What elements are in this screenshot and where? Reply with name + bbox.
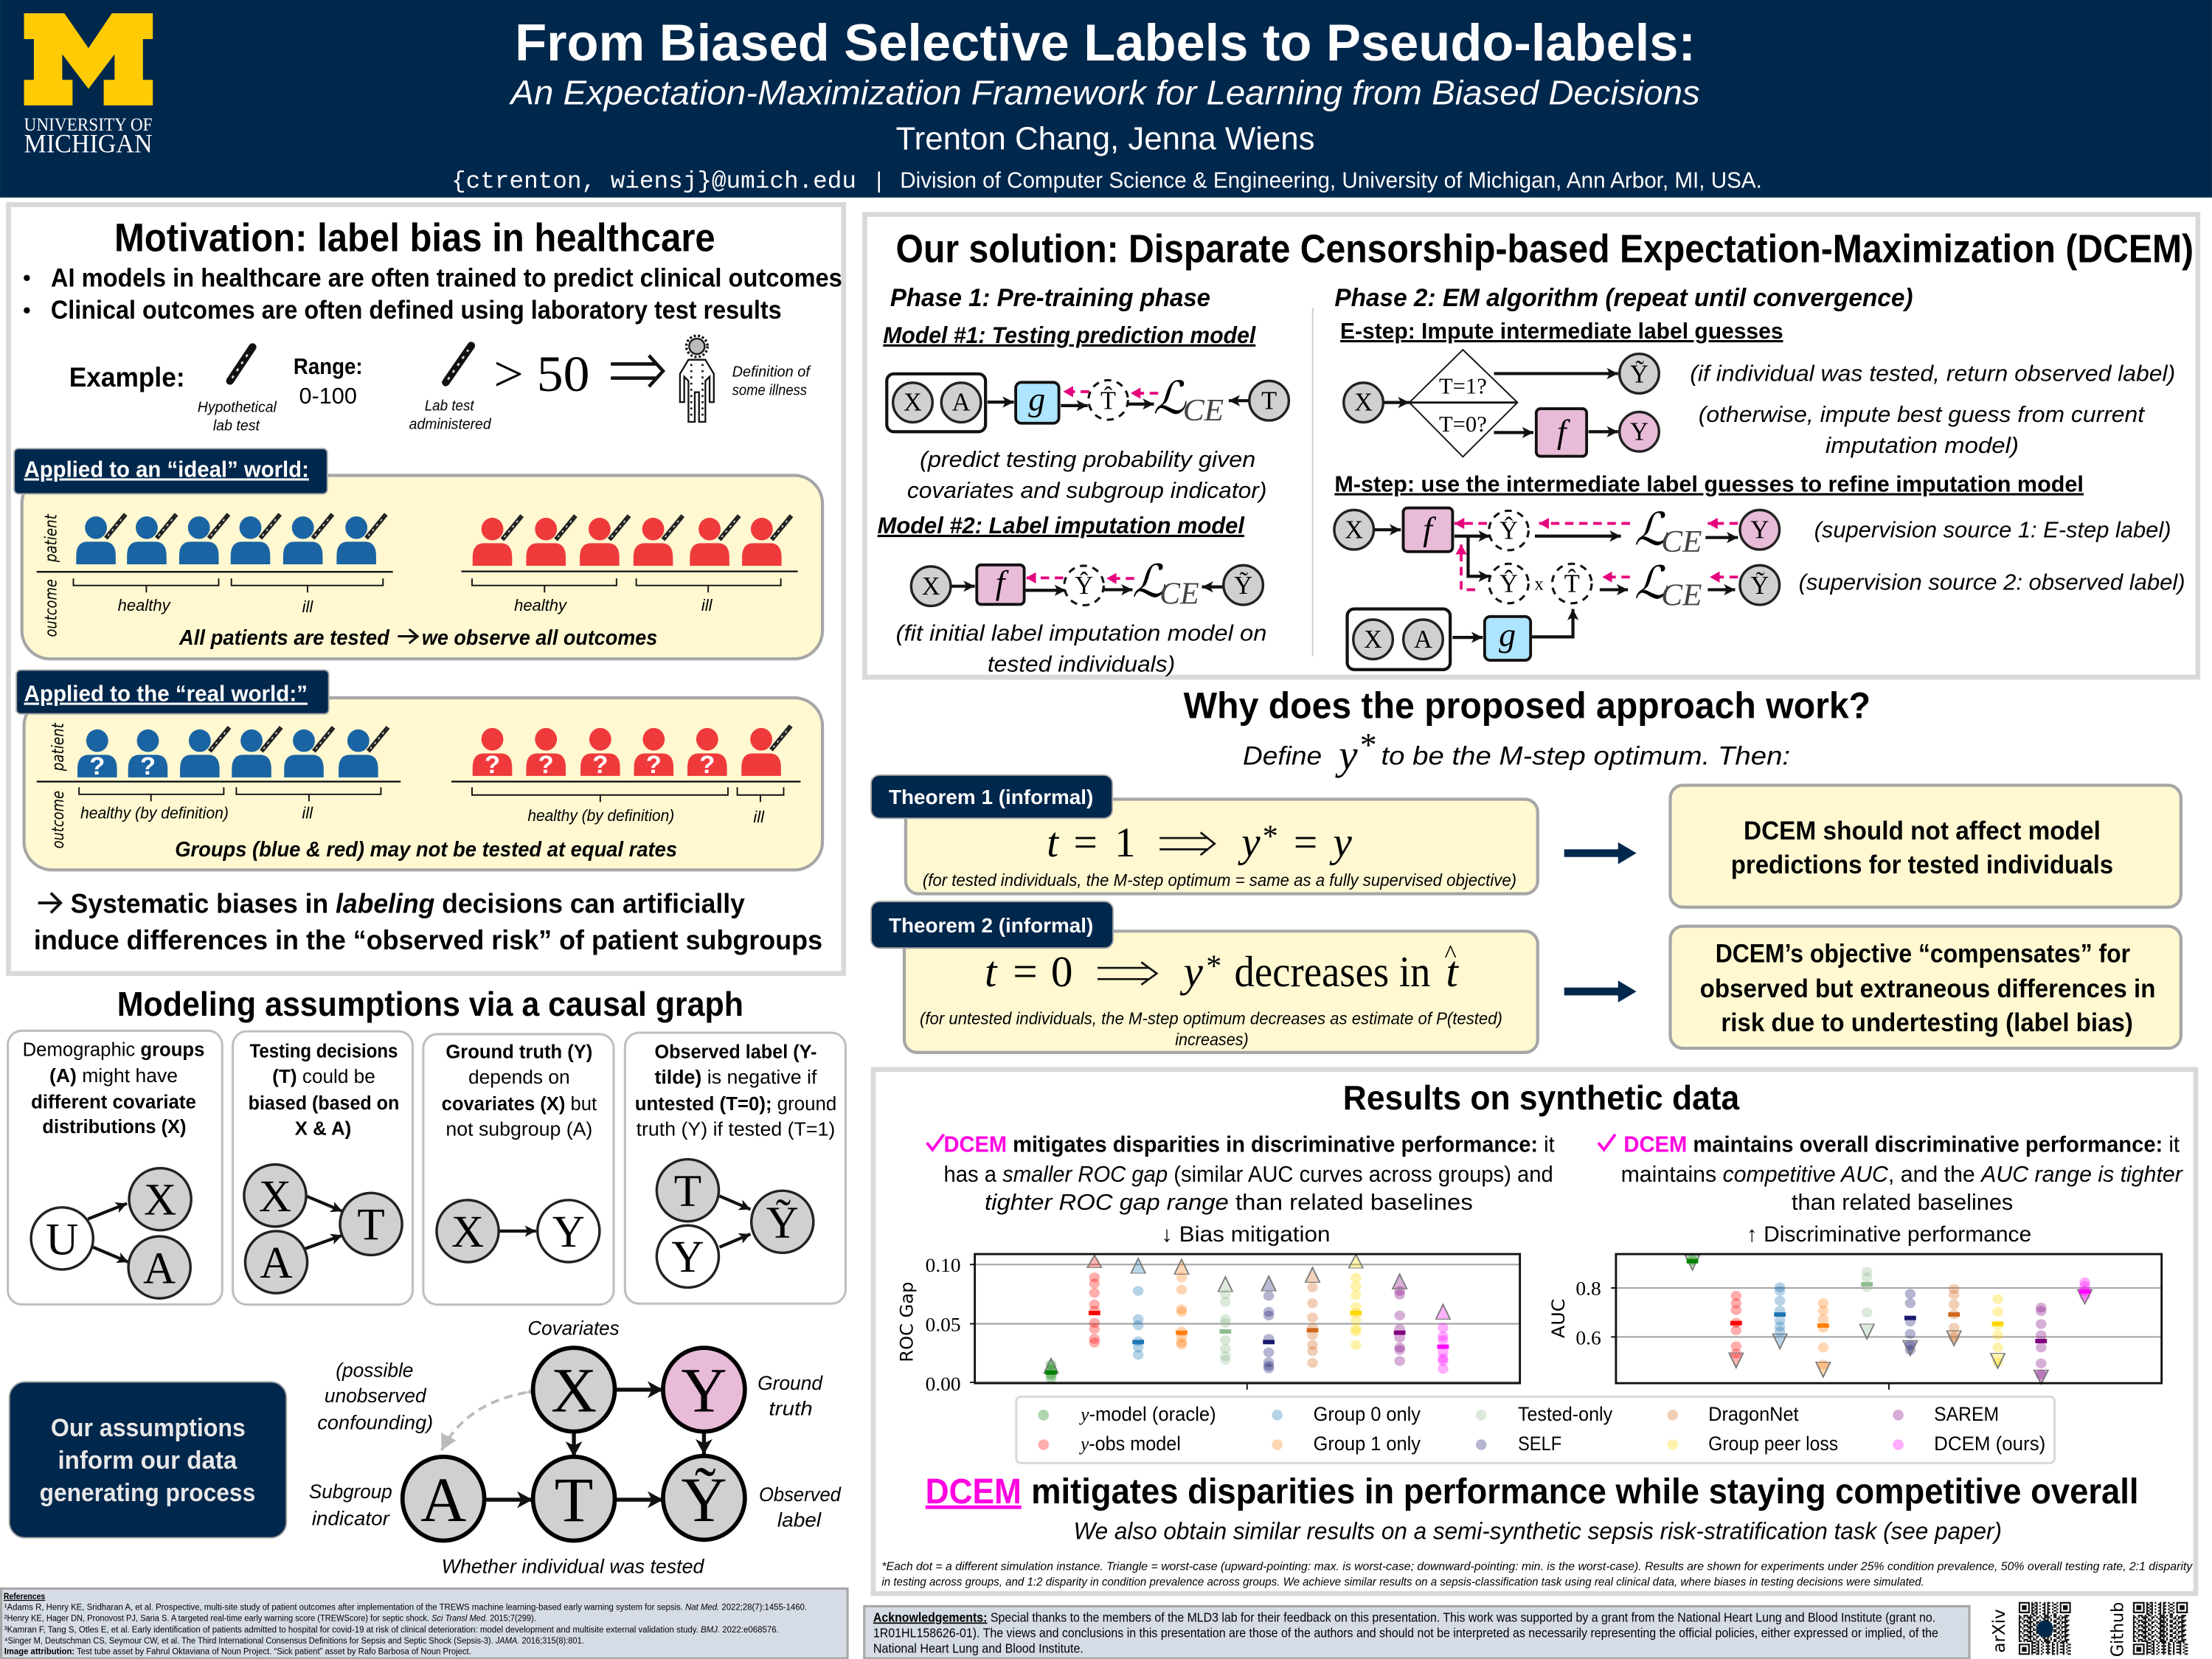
heading: why: Why does the proposed approach work?	[1184, 685, 1871, 727]
callout: assumptions inform data generating process: Our assumptions	[51, 1414, 246, 1442]
key takeaway: mitigates disparities in performance while staying competitive overall	[1031, 1472, 2139, 1511]
red patients, rarely tested: ?	[699, 751, 715, 779]
card: observed label	[625, 1033, 845, 1303]
key takeaway: DCEM	[926, 1472, 1022, 1511]
example definition row: Hypothetical	[198, 399, 277, 415]
formula: theorem 2: y	[1180, 947, 1204, 996]
chart legend: SAREM	[1934, 1403, 1999, 1425]
callout: assumptions inform data generating process: inform our data	[58, 1447, 238, 1475]
formula: theorem 1: =	[1294, 820, 1317, 866]
chart: ROC gap: 0.10	[926, 1254, 961, 1276]
implication box 2: observed but extraneous differences in	[1700, 974, 2155, 1003]
caption: unequal rates: Groups (blue & red) may not be tested at equal rates	[175, 838, 677, 862]
diagram: E-step: f	[1557, 413, 1571, 451]
diagram: label imputation model: Ỹ	[1234, 572, 1252, 600]
panel: ideal world	[14, 448, 822, 659]
QR code: arXiv	[1990, 1602, 2071, 1655]
formula: theorem 1	[1047, 820, 1352, 866]
results text: bias mitigation	[927, 1132, 1555, 1215]
heading: causal graph: Modeling assumptions via a causal graph	[117, 985, 743, 1023]
chart: AUC: AUC	[1548, 1299, 1569, 1338]
diagram: data generating process graph: Ỹ	[681, 1464, 727, 1535]
card: ground truth: depends on	[468, 1067, 570, 1088]
authors: Trenton Chang, Jenna Wiens	[896, 121, 1315, 157]
outcome labels: ill	[302, 803, 313, 822]
node labels: Ground	[757, 1372, 823, 1394]
outcome labels: healthy (by definition)	[527, 806, 674, 825]
diagram: testing prediction model: X	[904, 389, 922, 417]
outcome labels	[80, 803, 765, 826]
results text: bias mitigation: DCEM mitigates disparities in discriminative performance: it	[944, 1132, 1555, 1157]
example definition row: some illness	[732, 383, 807, 399]
diagram: M-step: Ỹ	[1750, 572, 1769, 600]
formula: theorem 2: ^	[1445, 940, 1457, 968]
heading: results: Results on synthetic data	[1343, 1078, 1740, 1117]
callout: assumptions inform data generating process: generating process	[40, 1479, 255, 1507]
caption: all tested	[178, 626, 657, 650]
card: ground truth: not subgroup (A)	[445, 1120, 592, 1140]
card: testing decisions: X & A)	[295, 1119, 351, 1140]
diagram: E-step: Y	[1630, 418, 1648, 446]
diagram: M-step: X	[1364, 626, 1382, 654]
diagram: label imputation model: Ŷ	[1075, 572, 1093, 600]
chart legend: y-model (oracle)	[1078, 1403, 1216, 1425]
QR code: arXiv: arXiv	[1990, 1609, 2009, 1653]
references box: ²Henry KE, Hager DN, Pronovost PJ, Saria S. A targeted real-time early warning score (TREWScore) for septic shock. Sci Transl Med. 2015;7(299).	[4, 1613, 536, 1624]
chart: AUC	[1548, 1222, 2162, 1390]
icon: sick patient	[680, 336, 714, 422]
formula: theorem 2: 0	[1051, 947, 1073, 996]
diagram: label imputation model: CE	[1159, 578, 1199, 612]
bullet list	[24, 263, 842, 325]
panel: motivation	[9, 204, 844, 974]
card: demographic groups: Demographic groups	[23, 1040, 204, 1061]
implication box 1: predictions for tested individuals	[1731, 851, 2113, 879]
footnote: in testing across groups, and 1:2 disparity in condition prevalence across groups. We achieve similar results on a sepsis-classification task using real clinical data, where biases in testing decisions were simulated.	[881, 1576, 1924, 1589]
outcome labels: ill	[701, 596, 713, 614]
implication box 2	[1671, 927, 2181, 1048]
references box	[1, 1589, 847, 1658]
formula: theorem 2: *	[1206, 950, 1221, 984]
graph: T and Y to Y-tilde: T	[674, 1166, 701, 1216]
diagram: testing prediction model: A	[952, 389, 971, 417]
node labels: Whether individual was tested	[442, 1556, 705, 1578]
definition line: to be the M-step optimum. Then:	[1381, 742, 1790, 771]
chart legend: DragonNet	[1708, 1403, 1799, 1425]
diagram: testing prediction model: T̂	[1100, 387, 1116, 415]
formula: theorem 1: t	[1047, 820, 1060, 866]
email and affiliation: |	[876, 167, 882, 193]
red patients, rarely tested	[473, 726, 791, 779]
node labels: label	[777, 1509, 822, 1531]
card: observed label: Observed label (Y-	[654, 1042, 817, 1062]
title: From Biased Selective Labels to Pseudo-labels:	[515, 13, 1696, 72]
formula: theorem 1: y	[1238, 820, 1261, 866]
panel: real world: outcome	[49, 791, 68, 848]
subtitle: An Expectation-Maximization Framework for Learning from Biased Decisions	[508, 74, 1700, 112]
diagram: E-step: T=1?	[1439, 374, 1487, 399]
theorem 2: Theorem 2 (informal)	[889, 914, 1093, 937]
results text: bias mitigation: has a smaller ROC gap (similar AUC curves across groups) and	[944, 1162, 1553, 1187]
results text: discriminative performance: maintains competitive AUC, and the AUC range is tighter	[1621, 1162, 2184, 1187]
node labels: Observed	[759, 1483, 842, 1506]
node labels: confounding)	[317, 1411, 433, 1433]
chart: AUC: ↑ Discriminative performance	[1747, 1222, 2031, 1247]
definition line: *	[1360, 726, 1377, 763]
chart legend: Tested-only	[1518, 1403, 1613, 1425]
node labels: (possible	[336, 1360, 413, 1382]
phase 1 column: Model #2: Label imputation model	[878, 512, 1245, 538]
logo: University of Michigan: UNIVERSITY OF	[24, 114, 153, 135]
diagram: testing prediction model: T	[1261, 387, 1277, 415]
email and affiliation: {ctrenton, wiensj}@umich.edu	[451, 167, 856, 195]
results text: discriminative performance: DCEM maintains overall discriminative performance: it	[1623, 1132, 2180, 1157]
chart: ROC gap: ROC Gap	[896, 1282, 917, 1362]
panel: our solution	[864, 215, 2198, 677]
graph: U to X and A: A	[143, 1243, 176, 1293]
diagram: E-step: Ỹ	[1630, 360, 1648, 388]
chart legend: y-obs model	[1078, 1433, 1181, 1455]
diagram: M-step: Ŷ	[1499, 517, 1518, 545]
diagram: E-step	[1344, 350, 1659, 457]
panel: ideal world: patient	[43, 513, 61, 563]
results text: discriminative performance	[1598, 1132, 2184, 1215]
outcome labels: ill	[753, 808, 765, 826]
diagram: testing prediction model	[887, 373, 1289, 432]
footnote: *Each dot = a different simulation instance. Triangle = worst-case (upward-pointing: max. is worst-case; downward-pointing: min. is the worst-case). Results are shown for experiments under 25% condition prevalence, 50% overall testing rate, 2:1 disparity	[881, 1560, 2193, 1573]
diagram: M-step: CE	[1661, 525, 1702, 559]
definition line	[1243, 726, 1790, 778]
graph: U to X and A	[31, 1168, 191, 1298]
phase 1 column: Model #1: Testing prediction model	[883, 322, 1256, 348]
chart legend: SELF	[1518, 1433, 1561, 1455]
card: observed label: tilde) is negative if	[654, 1067, 817, 1088]
arrow: theorem 2 to implication	[1564, 980, 1637, 1002]
section: why does it work	[871, 685, 2181, 1053]
card: testing decisions: (T) could be	[272, 1067, 375, 1087]
diagram: data generating process graph: Y	[681, 1355, 727, 1426]
red patients, rarely tested: ?	[538, 751, 554, 779]
outcome labels: healthy (by definition)	[80, 803, 229, 822]
references box: ⁴Singer M, Deutschman CS, Seymour CW, et al. The Third International Consensus Definitions for Sepsis and Septic Shock (Sepsis-3). JAMA. 2016;315(8):801.	[4, 1635, 584, 1646]
chart legend: Group 1 only	[1314, 1433, 1421, 1455]
chart: AUC: 0.6	[1575, 1327, 1601, 1349]
caption: all tested: we observe all outcomes	[422, 626, 657, 650]
email and affiliation: Division of Computer Science & Engineering, University of Michigan, Ann Arbor, MI, USA.	[900, 167, 1762, 193]
diagram: label imputation model: f	[996, 564, 1010, 601]
example definition row	[69, 336, 811, 434]
example definition row: 0-100	[299, 384, 357, 409]
theorem 1	[871, 775, 1538, 894]
references box: Image attribution: Test tube asset by Fahrul Oktaviana of Noun Project. “Sick patient” asset by Rafo Barbosa of Noun Project.	[4, 1646, 471, 1656]
results text: bias mitigation: tighter ROC gap range than related baselines	[985, 1190, 1473, 1215]
diagram: M-step: A	[1414, 626, 1432, 654]
phase 2 column: imputation model)	[1826, 433, 2019, 458]
acknowledgements box: 1R01HL158626-01). The views and conclusions in this presentation are those of the authors and should not be interpreted as necessarily representing the official policies, either expressed or implied, of the	[873, 1626, 1938, 1641]
blue patients, all tested	[76, 514, 386, 564]
card: testing decisions: biased (based on	[249, 1093, 399, 1114]
implication box 1	[1671, 786, 2181, 907]
tab: real world	[16, 670, 329, 714]
formula: theorem 1: 1	[1114, 820, 1136, 866]
card: ground truth	[423, 1034, 614, 1305]
conclusion statement: Systematic biases in labeling decisions can artificially	[71, 887, 745, 918]
outcome labels: healthy	[514, 596, 568, 614]
node labels: unobserved	[325, 1385, 427, 1407]
tab: ideal world: Applied to an “ideal” world:	[24, 457, 309, 482]
diagram: M-step: X	[1345, 516, 1363, 544]
diagram: label imputation model: X	[922, 572, 940, 600]
definition line: y	[1335, 732, 1358, 778]
chart legend: Group 0 only	[1314, 1403, 1421, 1425]
formula: theorem 2: t	[985, 947, 998, 996]
phase 1 column: (fit initial label imputation model on	[896, 620, 1267, 645]
diagram: M-step: g	[1499, 616, 1516, 654]
diagram: testing prediction model: ℒ	[1154, 373, 1188, 423]
acknowledgements box	[864, 1606, 1969, 1658]
diagram: testing prediction model: g	[1028, 381, 1045, 418]
phase 1 column: tested individuals)	[988, 651, 1175, 676]
diagram: M-step: f	[1423, 510, 1437, 548]
references box: ¹Adams R, Henry KE, Sridharan A, et al. Prospective, multi-site study of patient outcomes after implementation of the TREWS machine learning-based early warning system for sepsis. Nat Med. 2022;28(7):1455-1460.	[4, 1601, 807, 1612]
phase 1 column: covariates and subgroup indicator)	[907, 478, 1267, 503]
phase 2 column: (otherwise, impute best guess from current	[1699, 402, 2146, 427]
node labels: Covariates	[527, 1317, 620, 1339]
example definition row: Lab test	[425, 398, 475, 415]
chart: ROC gap	[896, 1222, 1520, 1395]
heading: motivation: Motivation: label bias in healthcare	[114, 216, 715, 260]
blue patients, partly tested: ?	[89, 752, 105, 780]
implication box 2: risk due to undertesting (label bias)	[1721, 1008, 2133, 1037]
formula: theorem 1: =	[1074, 820, 1098, 866]
panel: real world: patient	[49, 722, 68, 772]
diagram: M-step: x	[1534, 574, 1544, 594]
footnote	[881, 1560, 2193, 1589]
acknowledgements box: National Heart Lung and Blood Institute.	[873, 1641, 1084, 1656]
diagram: data generating process graph	[309, 1317, 842, 1578]
card: demographic groups: distributions (X)	[42, 1117, 186, 1137]
card: observed label: untested (T=0); ground	[635, 1094, 836, 1115]
graph: X and A to T: T	[357, 1199, 385, 1250]
card: demographic groups: different covariate	[31, 1092, 196, 1112]
icon: test tube	[230, 347, 252, 381]
arrow: theorem 1 to implication	[1564, 842, 1637, 864]
card: demographic groups: (A) might have	[49, 1066, 178, 1087]
graph: T and Y to Y-tilde: Ỹ	[766, 1197, 799, 1247]
outcome labels: healthy	[118, 596, 172, 614]
graph: X to Y	[437, 1200, 600, 1262]
card: observed label: truth (Y) if tested (T=1)	[637, 1120, 835, 1140]
implication box 1: DCEM should not affect model	[1744, 817, 2101, 845]
phase 1 column: Phase 1: Pre-training phase	[890, 284, 1210, 312]
diagram: M-step: Y	[1750, 516, 1769, 544]
phase 1 column: (predict testing probability given	[920, 447, 1255, 472]
phase 2 column: (supervision source 2: observed label)	[1799, 569, 2185, 595]
outcome labels	[118, 596, 713, 616]
tab: ideal world	[14, 448, 327, 493]
formula: theorem 2: =	[1013, 947, 1038, 996]
theorem 2: (for untested individuals, the M-step optimum decreases as estimate of P(tested)	[920, 1009, 1502, 1028]
diagram: M-step: ℒ	[1634, 505, 1668, 555]
example definition row: Range:	[294, 354, 363, 379]
references box: References	[4, 1591, 46, 1601]
example definition row: Example:	[69, 361, 185, 392]
diagram: label imputation model: ℒ	[1132, 557, 1166, 607]
blue patients, partly tested: ?	[140, 752, 156, 780]
node labels: Subgroup	[309, 1480, 392, 1503]
theorem 2: increases)	[1175, 1030, 1249, 1049]
diagram: M-step: T̂	[1564, 569, 1580, 598]
diagram: label imputation model	[911, 557, 1263, 612]
formula: theorem 1: *	[1263, 820, 1278, 854]
tab: real world: Applied to the “real world:”	[24, 682, 308, 707]
example definition row: administered	[409, 416, 491, 432]
graph: U to X and A: X	[144, 1175, 176, 1225]
panel: results on synthetic data	[873, 1070, 2196, 1593]
chart legend	[1016, 1396, 2055, 1463]
chart: ROC gap: 0.05	[926, 1314, 961, 1336]
card: ground truth: Ground truth (Y)	[445, 1042, 592, 1062]
graph: X to Y: X	[451, 1207, 484, 1257]
QR code: Github	[2108, 1602, 2188, 1657]
diagram: E-step: X	[1354, 389, 1373, 417]
formula: theorem 2	[985, 940, 1459, 996]
theorem 1: Theorem 1 (informal)	[889, 786, 1093, 808]
QR code: Github: Github	[2108, 1602, 2127, 1657]
chart legend: DCEM (ours)	[1934, 1433, 2045, 1455]
callout: assumptions inform data generating process	[10, 1382, 286, 1538]
diagram: data generating process graph: X	[551, 1355, 597, 1426]
logo: University of Michigan: MICHIGAN	[24, 129, 153, 159]
chart: ROC gap: 0.00	[926, 1373, 961, 1395]
phase 2 column: Phase 2: EM algorithm (repeat until convergence)	[1334, 284, 1913, 312]
chart legend: Group peer loss	[1708, 1433, 1838, 1455]
theorem 2	[871, 901, 1538, 1053]
references box: ³Kamran F, Tang S, Otles E, et al. Early identification of patients admitted to hospital for covid-19 at risk of clinical deterioration: model development and multisite external validation study. BMJ. 2022:e068576.	[4, 1624, 779, 1635]
graph: X and A to T	[244, 1165, 402, 1293]
results text: discriminative performance: than related baselines	[1792, 1190, 2013, 1215]
diagram: data generating process graph: T	[555, 1464, 593, 1535]
card: testing decisions	[233, 1031, 412, 1305]
red patients, rarely tested: ?	[485, 751, 500, 779]
diagram: data generating process graph: A	[420, 1464, 466, 1535]
sepsis note: We also obtain similar results on a semi-synthetic sepsis risk-stratification task (see paper)	[1074, 1518, 2002, 1545]
node labels: truth	[769, 1397, 813, 1419]
arrow: dashed confounding link	[442, 1393, 526, 1450]
graph: U to X and A: U	[46, 1214, 78, 1264]
card: demographic groups	[8, 1031, 222, 1304]
example definition row: > 50	[493, 346, 589, 402]
example definition row: lab test	[213, 418, 260, 434]
graph: T and Y to Y-tilde: Y	[671, 1232, 704, 1282]
icon: test tube administered	[445, 346, 471, 382]
graph: X and A to T: X	[259, 1171, 291, 1222]
phase 2 column: E-step: Impute intermediate label guesses	[1340, 319, 1783, 344]
diagram: testing prediction model: CE	[1183, 394, 1224, 428]
conclusion statement: induce differences in the “observed risk” of patient subgroups	[34, 924, 822, 955]
logo: University of Michigan	[24, 13, 153, 159]
acknowledgements box: Acknowledgements: Special thanks to the members of the MLD3 lab for their feedback on this presentation. This work was supported by a grant from the National Heart Lung and Blood Institute (grant no.	[873, 1610, 1935, 1625]
email and affiliation	[451, 167, 1762, 195]
card: testing decisions: Testing decisions	[250, 1041, 398, 1061]
example definition row: Definition of	[732, 364, 811, 381]
graph: T and Y to Y-tilde	[656, 1160, 814, 1287]
phase 1 column	[878, 284, 1289, 676]
theorem 1: (for tested individuals, the M-step optimum = same as a fully supervised objective)	[923, 870, 1516, 890]
chart: ROC gap: ↓ Bias mitigation	[1161, 1222, 1331, 1247]
phase 2 column: M-step: use the intermediate label guesses to refine imputation model	[1334, 472, 2084, 497]
diagram: M-step	[1334, 505, 1780, 670]
phase 2 column	[1334, 284, 2185, 670]
red patients, all tested	[473, 516, 791, 566]
red patients, rarely tested: ?	[592, 751, 608, 779]
red patients, rarely tested: ?	[646, 751, 662, 779]
bullet list: Clinical outcomes are often defined using laboratory test results	[51, 296, 782, 325]
diagram: M-step: Ŷ	[1499, 569, 1518, 598]
diagram: M-step: ℒ	[1634, 558, 1668, 609]
diagram: M-step: CE	[1661, 578, 1702, 612]
node labels: indicator	[312, 1507, 390, 1529]
node labels	[309, 1317, 842, 1578]
header banner	[0, 0, 2212, 198]
panel: real world	[16, 670, 822, 870]
conclusion statement	[34, 887, 822, 955]
implication box 2: DCEM’s objective “compensates” for	[1716, 939, 2130, 968]
blue patients, partly tested	[77, 727, 388, 780]
chart: AUC: 0.8	[1575, 1278, 1601, 1300]
formula: theorem 2: t	[1446, 947, 1459, 996]
panel: ideal world: outcome	[43, 579, 61, 637]
outcome labels: ill	[302, 598, 313, 616]
caption: all tested: All patients are tested	[178, 626, 389, 650]
graph: X and A to T: A	[260, 1238, 293, 1288]
phase 2 column: (if individual was tested, return observed label)	[1690, 361, 2175, 386]
bullet list: AI models in healthcare are often trained to predict clinical outcomes	[51, 263, 842, 292]
definition line: Define	[1243, 742, 1322, 771]
formula: theorem 1: y	[1329, 820, 1352, 866]
formula: theorem 2: decreases in	[1235, 947, 1430, 996]
card: ground truth: covariates (X) but	[442, 1094, 597, 1115]
diagram: E-step: T=0?	[1439, 412, 1487, 437]
arrow: implies	[611, 356, 663, 387]
phase 2 column: (supervision source 1: E-step label)	[1814, 518, 2171, 543]
graph: X to Y: Y	[552, 1207, 585, 1257]
